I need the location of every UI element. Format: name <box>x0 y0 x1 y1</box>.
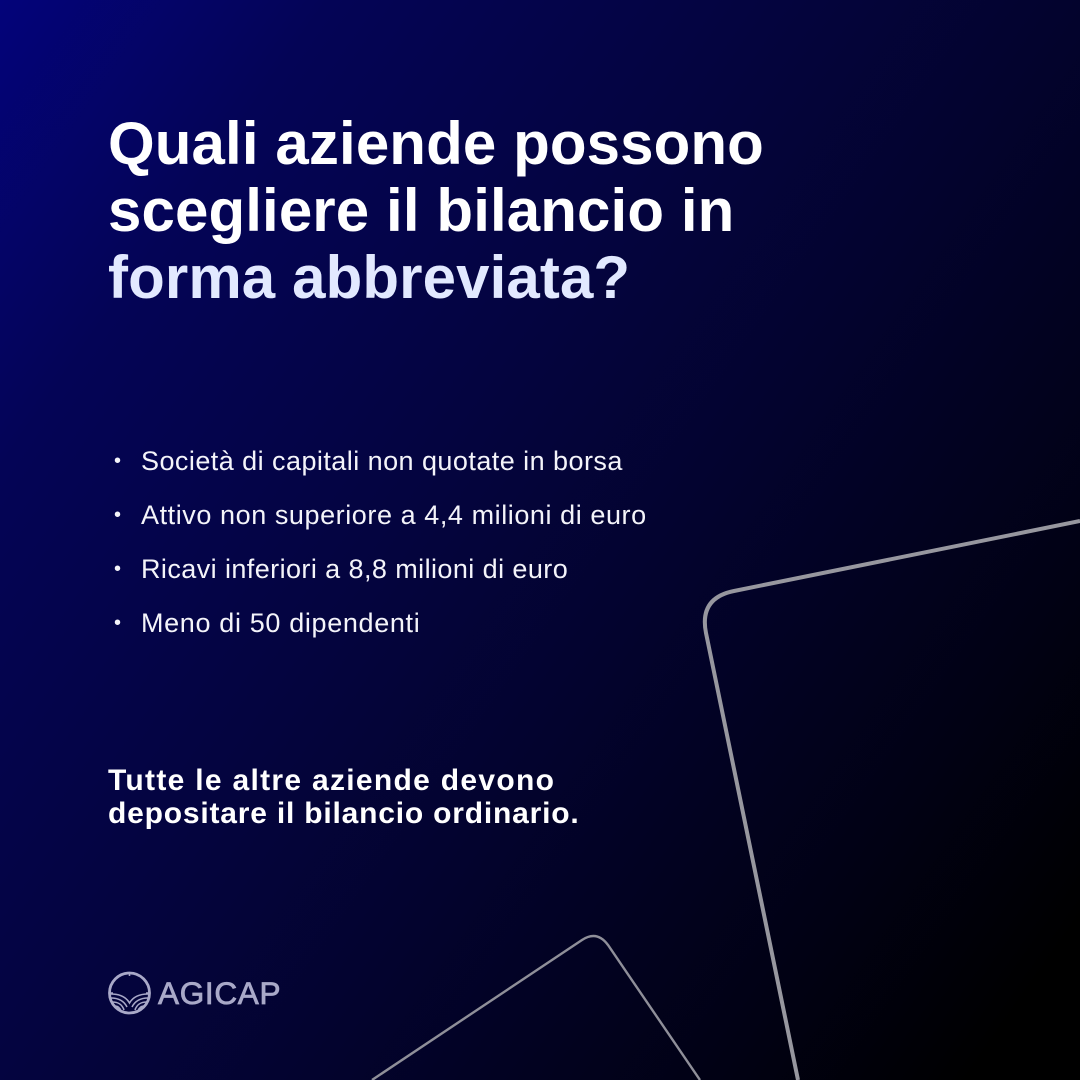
title: scegliere il bilancio in <box>108 177 734 244</box>
large tilted rounded square outline <box>705 521 1080 1080</box>
icon: logo circle <box>108 972 151 1014</box>
closing note <box>108 764 579 830</box>
bullet list <box>114 446 647 638</box>
bullet: società: • <box>114 450 121 472</box>
small tilted rounded square outline <box>372 936 700 1080</box>
bullet: attivo: Attivo non superiore a 4,4 milioni di euro <box>141 500 647 530</box>
bullet: società: Società di capitali non quotate in borsa <box>141 446 623 476</box>
bullet: attivo: • <box>114 504 121 526</box>
title <box>108 110 764 311</box>
title: forma abbreviata? <box>108 244 630 311</box>
bullet: ricavi: • <box>114 558 121 580</box>
bullet: ricavi: Ricavi inferiori a 8,8 milioni di euro <box>141 554 568 584</box>
closing note: depositare il bilancio ordinario. <box>108 797 579 830</box>
logo wordmark: AGICAP <box>158 975 281 1011</box>
closing note: Tutte le altre aziende devono <box>108 764 555 797</box>
bullet: dipendenti: • <box>114 612 121 634</box>
logo: AGICAP <box>108 972 281 1014</box>
title: Quali aziende possono <box>108 110 764 177</box>
bullet: dipendenti: Meno di 50 dipendenti <box>141 608 420 638</box>
